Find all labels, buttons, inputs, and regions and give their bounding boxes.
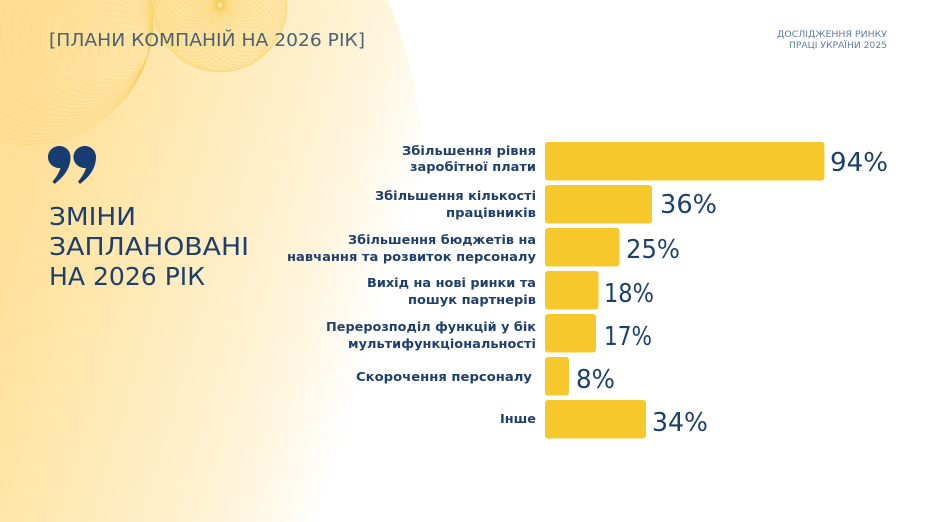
row: 25%: 25% [626, 235, 680, 265]
report name, top right [777, 29, 887, 50]
row: 94%: Збільшення рівня [402, 143, 536, 158]
row: 8%: Скорочення персоналу [356, 369, 532, 384]
row: 18%: Вихід на нові ринки та [367, 275, 536, 290]
decorative line pattern: right mesh [145, 0, 295, 80]
row: 18%: 18% [604, 279, 654, 309]
icon: quotation mark [48, 146, 96, 184]
report name, top right: ДОСЛІДЖЕННЯ РИНКУ [777, 29, 887, 39]
row: 17%: Перерозподіл функцій у бік [326, 319, 536, 334]
row: 36%: Збільшення кількості [375, 188, 536, 203]
heading: ЗАПЛАНОВАНІ [49, 232, 249, 261]
report name, top right: ПРАЦІ УКРАЇНИ 2025 [789, 40, 887, 50]
row: 8%: 8% [576, 365, 615, 395]
heading: ЗМІНИ [49, 202, 136, 231]
row: 25% [287, 228, 680, 266]
row: 8% [356, 357, 615, 396]
row: 17%: 17% [604, 322, 652, 352]
heading [49, 202, 249, 291]
row: 36%: 36% [660, 190, 717, 220]
row: 34% [500, 400, 708, 438]
row: 36%: працівників [446, 205, 536, 220]
row: 94%: 94% [830, 148, 888, 178]
row: 94%: заробітної плати [410, 159, 536, 174]
row: 17%: мультифункціональності [348, 336, 536, 351]
bar chart [287, 142, 888, 438]
row: 34%: Інше [500, 411, 536, 426]
row: 17% [326, 314, 652, 352]
row: 25%: Збільшення бюджетів на [348, 232, 536, 247]
section title: [ПЛАНИ КОМПАНІЙ НА 2026 РІК] [49, 29, 365, 51]
row: 18% [367, 271, 654, 310]
row: 36% [375, 185, 717, 224]
row: 34%: 34% [652, 408, 708, 438]
decorative line pattern: left concentric rings [0, 0, 153, 144]
heading: НА 2026 РІК [49, 262, 205, 291]
background: soft yellow gradient shape [0, 0, 428, 522]
row: 94% [402, 142, 888, 180]
row: 25%: навчання та розвиток персоналу [287, 249, 536, 264]
row: 18%: пошук партнерів [408, 292, 536, 307]
